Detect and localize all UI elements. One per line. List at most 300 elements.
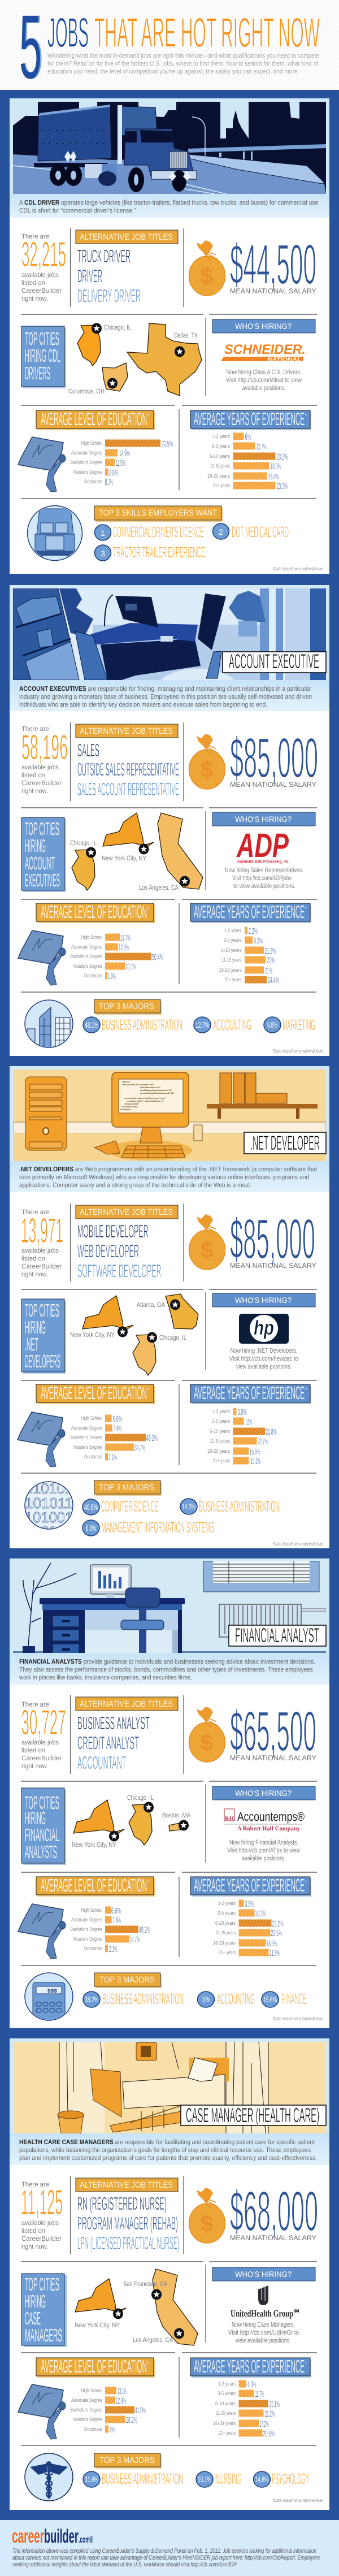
chart: experience: 3-5 years: [212, 443, 230, 449]
map: hiring cities: Los Angeles, CA: [133, 2336, 173, 2344]
who's hiring: WHO'S HIRING?: [235, 1296, 292, 1305]
chart: education: Doctorate: [84, 2426, 102, 2432]
header area: [0, 0, 339, 97]
education heading: [36, 1875, 155, 1897]
job count: listed on: [21, 1254, 45, 1262]
panel: case manager: RN (REGISTERED NURSE): [77, 2193, 167, 2214]
majors list: 38.2%: [85, 1995, 98, 2004]
chart: experience: 22.7%: [258, 1437, 268, 1447]
chart: experience: 3-5 years: [224, 937, 242, 943]
logo: hp: hp: [254, 1316, 274, 1339]
map: hiring cities: Chicago, IL: [70, 839, 97, 847]
who's hiring: Visit http://cb.com/sNnat to view: [226, 376, 302, 384]
chart: education: 20.7%: [125, 962, 136, 972]
illustration: developer desk: </combres>: [120, 1109, 131, 1111]
chart: experience: 16-20 years: [213, 2421, 236, 2427]
logo: Schneider National: NATIONAL: [267, 356, 301, 362]
who's hiring: Visit http://cb.com/ADPjobs: [232, 874, 292, 882]
chart: experience: 22.5%: [271, 1929, 282, 1938]
panel: case manager: 41.8%: [135, 2406, 146, 2415]
job count: There are: [21, 232, 49, 240]
panel: case manager: PROGRAM MANAGER (REHAB): [77, 2213, 178, 2233]
description: FINANCIAL ANALYSTS provide guidance to individuals and businesses seeking advice about investment decisions.: [19, 1659, 315, 1665]
illustration: developer desk: <resourceSet name="siteCss" type="css">: [124, 1097, 166, 1099]
chart: experience: 17.2%: [260, 2419, 269, 2429]
chart: education: 14.7%: [120, 933, 131, 943]
icon: binary digits in circle: 101011: [25, 1495, 73, 1512]
experience heading: *: [305, 1880, 307, 1885]
who's hiring: available positions.: [242, 384, 286, 392]
alternative job titles: [76, 724, 179, 799]
chart: experience: 6-10 years: [221, 947, 242, 954]
icon: money bag: $: [201, 1238, 213, 1263]
map: hiring cities: [75, 2269, 198, 2345]
alternative job titles: CREDIT ANALYST: [77, 1733, 139, 1753]
majors list: 19%: [202, 1995, 210, 2004]
job count: available jobs: [21, 2219, 59, 2227]
majors list: BUSINESS ADMINISTRATION: [102, 1990, 184, 2007]
top cities heading: HIRING: [25, 2291, 46, 2311]
majors heading: TOP 3 MAJORS: [99, 1483, 154, 1492]
chart: experience: 18.3%: [270, 462, 281, 471]
majors list: [82, 1498, 280, 1536]
logo: Schneider National: SCHNEIDER.: [224, 342, 306, 357]
chart: experience: 11-15 years: [221, 957, 242, 963]
chart: education: Doctorate: [84, 1454, 102, 1460]
education heading: *: [147, 413, 149, 418]
alternative job titles: [76, 230, 178, 306]
job count: listed on: [21, 279, 45, 287]
chart: education: 11.5%: [116, 458, 125, 468]
illustration: developer desk: defaultDuration="30": [140, 1086, 160, 1089]
alternative job titles: ALTERNATIVE JOB TITLES: [80, 726, 173, 736]
majors list: BUSINESS ADMINISTRATION: [102, 2470, 183, 2487]
chart: education: Bachelor's Degree: [70, 1926, 102, 1933]
illustration: developer desk: localChangeMonitorInterval="30": [140, 1089, 172, 1092]
logo: Accountemps: A Robert Half Company: [237, 1825, 300, 1832]
chart: experience: 3.8%: [237, 1408, 246, 1417]
description: [19, 200, 320, 214]
chart: education: 4%: [110, 2425, 115, 2435]
majors list: 12.7%: [195, 1020, 209, 1029]
panel: CDL driver: 23.3%: [277, 482, 288, 491]
chart: experience: 3-5 years: [212, 1418, 230, 1425]
chart: education: Doctorate: [84, 479, 102, 485]
job count: listed on: [21, 771, 45, 779]
chart: experience: 11%: [246, 1417, 252, 1427]
description: [19, 686, 312, 708]
icon: graduation cap: [18, 1904, 66, 1959]
chart: education: Bachelor's Degree: [70, 1435, 102, 1441]
map: hiring cities: Atlanta, GA: [137, 1301, 165, 1309]
alternative job titles: ACCOUNTANT: [77, 1752, 127, 1773]
footnote: *Data based on a national level: [272, 2016, 324, 2021]
chart: education: 7.4%: [113, 1424, 121, 1434]
chart: experience: 1-2 years: [218, 1900, 236, 1907]
panel: CDL driver: AVERAGE LEVEL OF EDUCATION: [41, 409, 147, 429]
skills list: 1: [101, 529, 105, 538]
chart: education: Doctorate: [84, 1946, 102, 1952]
education heading: [36, 1383, 155, 1404]
map: hiring cities: [70, 1294, 198, 1375]
who's hiring: WHO'S HIRING?: [235, 322, 292, 331]
salary: MEAN NATIONAL SALARY: [230, 2234, 317, 2242]
who's hiring: Visit http://cb.com/hewpac to: [229, 1354, 298, 1362]
majors heading: [94, 999, 162, 1015]
chart: education: Bachelor's Degree: [70, 954, 102, 960]
chart: education: 34.7%: [129, 1935, 140, 1945]
chart: experience: 21+ years: [219, 2430, 236, 2436]
footnote: *Data based on a national level: [272, 2497, 324, 2503]
chart: education: 6.6%: [113, 1414, 122, 1424]
chart: experience: [207, 1408, 277, 1466]
who's hiring: available positions.: [242, 1854, 285, 1862]
job count: [21, 2180, 63, 2250]
job count: There are: [21, 1208, 49, 1216]
panel: case manager: MANAGERS: [25, 2325, 62, 2345]
chart: experience: 3-5 years: [218, 1910, 236, 1916]
map: hiring cities: Dallas, TX: [174, 331, 198, 339]
icon: calculator in circle: [25, 1973, 73, 2025]
job count: listed on: [21, 1746, 45, 1754]
job count: There are: [21, 2180, 49, 2188]
majors list: COMPUTER SCIENCE: [101, 1498, 158, 1515]
top cities heading: .NET: [25, 1334, 38, 1354]
panel: account executive: TOP CITIES: [25, 819, 59, 839]
illustration: truck in city: [13, 102, 326, 194]
description: ACCOUNT EXECUTIVES are responsible for finding, managing and maintaining client relationships in a particular: [19, 686, 311, 692]
chart: education: Master's Degree: [73, 963, 102, 969]
panel: CDL driver: 23.2%: [277, 452, 288, 462]
map: hiring cities: Chicago, IL: [104, 323, 131, 331]
chart: education: Bachelor's Degree: [70, 460, 102, 466]
illustration: developer desk: <filters>: [122, 1081, 130, 1083]
chart: experience: 1-2 years: [212, 434, 230, 440]
top cities heading: [21, 326, 66, 388]
who's hiring: Visit http://cb.com/UdHeGr to: [228, 2328, 299, 2336]
who's hiring: [212, 2267, 315, 2344]
who's hiring: view available positions.: [236, 1362, 292, 1370]
panel: financial analyst: ANALYSTS: [25, 1842, 57, 1862]
panel: financial analyst: 49.2%: [139, 1925, 150, 1935]
map: hiring cities: [70, 813, 203, 891]
chart: education: Master's Degree: [73, 1936, 102, 1942]
chart: experience: 11-15 years: [210, 1438, 230, 1444]
skills list: [95, 523, 289, 561]
icon: money bag: [189, 734, 225, 789]
majors list: 15.6%: [263, 1995, 277, 2004]
job count: available jobs: [21, 763, 59, 771]
icon: money bag: [189, 240, 225, 296]
chart: education: [70, 1414, 158, 1462]
panel: financial analyst: 23.2%: [272, 1919, 284, 1929]
icon: graduation cap: [18, 437, 66, 492]
job count: right now.: [21, 787, 48, 795]
panel: CDL driver: HIRING CDL: [25, 345, 60, 366]
chart: education: High School: [81, 934, 102, 941]
panel: account executive: 24.4%: [268, 976, 279, 985]
chart: experience: 4.3%: [247, 2380, 257, 2389]
alternative job titles: WEB DEVELOPER: [77, 1241, 139, 1261]
panel: account executive: [10, 585, 329, 1056]
footnote: *Data based on a national level: [272, 1048, 324, 1054]
top cities heading: [21, 1299, 66, 1374]
panel: account executive: 58,196: [21, 728, 68, 767]
chart: experience: 6-10 years: [215, 2401, 236, 2407]
chart: education: 6.6%: [111, 1906, 121, 1916]
chart: experience: 1-2 years: [218, 2381, 236, 2387]
majors heading: [94, 1973, 162, 1988]
majors heading: TOP 3 MAJORS: [99, 1002, 154, 1011]
chart: experience: 21+ years: [213, 1458, 230, 1464]
job count: available jobs: [21, 1738, 59, 1746]
chart: experience: 23%: [267, 956, 275, 966]
job count: right now.: [21, 1270, 48, 1278]
top cities heading: HIRING: [25, 835, 46, 856]
icon: graduation cap: [18, 930, 66, 985]
icon: graduation cap: [18, 2384, 66, 2439]
who's hiring: Now hiring Sales Representatives.: [225, 866, 303, 874]
majors heading: TOP 3 MAJORS: [99, 1975, 155, 1985]
who's hiring: WHO'S HIRING?: [235, 815, 292, 824]
chart: experience: 11.7%: [255, 2389, 264, 2399]
map: hiring cities: Columbus, OH: [68, 387, 105, 395]
map: hiring cities: Chicago, IL: [127, 1794, 154, 1802]
chart: experience: 6-10 years: [215, 1920, 236, 1926]
map: hiring cities: San Francisco, CA: [123, 2280, 167, 2288]
illustration: hospital room: [13, 2042, 326, 2133]
majors list: ACCOUNTING: [217, 1990, 255, 2007]
majors heading: TOP 3 MAJORS: [99, 2456, 155, 2465]
chart: education: High School: [81, 1415, 102, 1422]
top skills heading: [94, 506, 223, 522]
title numeral 5: [19, 0, 43, 97]
panel: account executive: 50.4%: [152, 953, 163, 962]
chart: experience: 16-20 years: [219, 967, 242, 973]
top cities heading: HIRING: [25, 1317, 46, 1337]
icon: money bag: $: [201, 1730, 213, 1755]
description: [19, 2139, 317, 2162]
description: work in places like banks, insurance companies, and securities firms.: [19, 1674, 192, 1681]
illustration: developer desk: [13, 1070, 326, 1161]
who's hiring: Now hiring Case Managers.: [232, 2320, 295, 2328]
chart: education: High School: [81, 2388, 102, 2394]
panel: CDL driver: [10, 98, 329, 574]
panel: financial analyst: TOP CITIES: [25, 1793, 59, 1813]
chart: experience: 8.3%: [254, 936, 263, 946]
chart: experience: [213, 2380, 280, 2439]
job count: CareerBuilder: [21, 2235, 62, 2242]
icon: money bag: $: [201, 2211, 213, 2236]
job count: right now.: [21, 1762, 48, 1770]
alternative job titles: ALTERNATIVE JOB TITLES: [80, 1207, 173, 1217]
chart: experience: 18.5%: [267, 1939, 277, 1949]
panel: case manager: AVERAGE LEVEL OF EDUCATION: [41, 2356, 147, 2376]
icon: money bag: $: [201, 757, 213, 782]
chart: experience: 15.5%: [250, 1447, 260, 1457]
majors list: 48.1%: [85, 1020, 98, 1029]
alternative job titles: DRIVER: [77, 266, 102, 286]
who's hiring: Now hiring Class A CDL Drivers.: [226, 368, 302, 376]
icon: binary digits in circle: 010100: [25, 1523, 73, 1540]
chart: education: High School: [81, 1907, 102, 1913]
footer: [0, 2520, 339, 2576]
chart: experience: 21+ years: [219, 1950, 236, 1956]
map: hiring cities: Chicago, IL: [159, 1334, 186, 1341]
top cities heading: DRIVERS: [25, 363, 50, 383]
panel: financial analyst: [10, 1558, 329, 2028]
map: hiring cities: New York City, NY: [70, 1331, 115, 1339]
chart: experience: 16-20 years: [207, 473, 230, 479]
icon: binary digits in circle: 101001: [25, 1509, 73, 1526]
icon: truck front in circle: [27, 505, 82, 561]
chart: experience: 3-5 years: [218, 2391, 236, 2397]
icon: binary digits in circle: [24, 1481, 73, 1530]
chart: education: 2.1%: [109, 1945, 118, 1954]
education heading: *: [147, 906, 149, 911]
job count: right now.: [21, 2242, 48, 2250]
icon: money bag: [189, 1707, 225, 1762]
footnote: *Data based on a national level: [272, 566, 324, 572]
chart: experience: 21+ years: [225, 977, 242, 983]
logo: UnitedHealth Group: [231, 2285, 301, 2319]
description: runs primarily on Microsoft Windows) who are responsible for developing various online interfaces, programs and: [19, 1174, 309, 1181]
chart: education: Associate Degree: [71, 2397, 102, 2404]
panel: .NET developer: SOFTWARE DEVELOPER: [77, 1261, 162, 1281]
chart: experience: [207, 432, 288, 491]
logo: Accountemps: [224, 1809, 305, 1832]
chart: experience: 21.8%: [269, 1949, 280, 1958]
education heading: *: [147, 1387, 149, 1392]
chart: education: High School: [81, 440, 102, 447]
panel: .NET developer: 31.8%: [266, 1427, 277, 1437]
chart: experience: 16-20 years: [213, 1940, 236, 1946]
job count: available jobs: [21, 1246, 59, 1254]
description: individuals who are able to identify key decision makers and execute sales from beginning to end.: [19, 702, 267, 708]
alternative job titles: [76, 1697, 178, 1773]
top cities heading: CASE: [25, 2308, 41, 2328]
chart: education: Bachelor's Degree: [70, 2407, 102, 2413]
chart: education: 7.4%: [112, 1916, 121, 1925]
panel: account executive: ACCOUNT: [25, 853, 55, 873]
top cities heading: [21, 2274, 67, 2347]
who's hiring: [212, 1786, 315, 1862]
alternative job titles: SALES: [77, 740, 99, 760]
who's hiring: to view available positions.: [233, 882, 295, 890]
chart: experience: 21.2%: [265, 946, 276, 956]
chart: experience: 3.8%: [245, 1899, 254, 1909]
panel: CDL driver: 32,215: [21, 235, 66, 274]
icon: money bag: [189, 2188, 225, 2243]
panel: case manager: 25.1%: [269, 2400, 280, 2409]
salary: MEAN NATIONAL SALARY: [230, 1754, 317, 1762]
who's hiring: Visit http://cb.com/ATps to view: [227, 1846, 300, 1854]
chart: experience: [219, 927, 279, 985]
chart: experience: 11-15 years: [210, 463, 230, 469]
logo: Accountemps: Accountemps®: [237, 1809, 305, 1824]
header area: JOBS: [47, 9, 89, 56]
description: [19, 1659, 315, 1681]
panel: .NET developer: 13,971: [21, 1211, 63, 1250]
chart: education: Master's Degree: [73, 1444, 102, 1451]
icon: calculator in circle: $$$: [47, 1988, 57, 1994]
job count: right now.: [21, 295, 48, 302]
panel: CDL driver: TOP CITIES: [25, 328, 59, 349]
panel: account executive: AVERAGE LEVEL OF EDUCATION: [41, 902, 147, 922]
chart: education: 13.1%: [118, 2387, 127, 2396]
map: hiring cities: [68, 323, 202, 396]
chart: experience: 21.2%: [264, 2409, 275, 2419]
majors list: 9.8%: [267, 1020, 277, 1029]
map: hiring cities: Boston, MA: [162, 1811, 190, 1819]
alternative job titles: ALTERNATIVE JOB TITLES: [80, 232, 173, 242]
panel: case manager: TOP CITIES: [25, 2274, 59, 2294]
who's hiring: WHO'S HIRING?: [235, 2270, 292, 2279]
majors list: BUSINESS ADMINISTRATION: [102, 1016, 182, 1033]
chart: experience: 6-10 years: [210, 1428, 230, 1435]
who's hiring: [212, 812, 315, 890]
chart: education: [70, 2387, 146, 2435]
logo: hp: [239, 1314, 289, 1344]
source note: seeking additional insights about the labor demand of the U.S. workforce should visit http://cb.com/SandDP.: [12, 2561, 237, 2568]
chart: education: 2.1%: [108, 1453, 117, 1462]
chart: education: 2.8%: [109, 468, 118, 478]
description: HEALTH CARE CASE MANAGERS are responsible for facilitating and coordinating patient care for specific patient: [19, 2139, 315, 2146]
intro paragraph: [47, 53, 319, 75]
map: hiring cities: Los Angeles, CA: [139, 884, 179, 891]
alternative job titles: MOBILE DEVELOPER: [77, 1221, 148, 1241]
map: hiring cities: New York City, NY: [75, 2321, 120, 2329]
illustration: developer desk: </resourceSet>: [124, 1103, 139, 1105]
chart: experience: [213, 1899, 284, 1958]
chart: education: 12.9%: [116, 2396, 126, 2406]
experience heading: *: [305, 2361, 307, 2366]
logo: Accountemps: RH: [225, 1816, 234, 1822]
illustration: developer desk: <resource path="~/content/site.css" />: [127, 1100, 164, 1102]
who's hiring: Now hiring .NET Developers.: [231, 1347, 297, 1354]
illustration: office: [13, 588, 326, 680]
chart: experience: 6%: [245, 432, 251, 442]
job count: [21, 1208, 63, 1278]
education heading: *: [147, 2361, 149, 2366]
logo: ADP: ADP: [236, 826, 289, 864]
majors heading: [94, 2453, 162, 2469]
icon: money bag: [189, 1214, 225, 1270]
who's hiring: Now hiring Financial Analysts.: [229, 1838, 298, 1846]
panel: financial analyst: FINANCIAL: [25, 1825, 59, 1845]
alternative job titles: DELIVERY DRIVER: [77, 285, 141, 306]
chart: education: 12.6%: [119, 943, 129, 953]
chart: education: Associate Degree: [71, 944, 102, 950]
job count: [21, 1700, 66, 1770]
chart: experience: 11-15 years: [216, 1930, 236, 1936]
job count: listed on: [21, 2227, 45, 2235]
panel: financial analyst: 30,727: [21, 1703, 66, 1742]
chart: education: Associate Degree: [71, 1425, 102, 1431]
chart: education: [70, 1906, 150, 1954]
map: hiring cities: New York City, NY: [72, 1841, 116, 1848]
education heading: *: [147, 1880, 149, 1885]
education heading: [36, 2356, 155, 2378]
map: hiring cities: [72, 1794, 190, 1848]
job count: CareerBuilder: [21, 1754, 62, 1762]
icon: caduceus in circle: [25, 2453, 73, 2501]
alternative job titles: BUSINESS ANALYST: [77, 1713, 150, 1733]
chart: experience: 2.2%: [249, 927, 258, 936]
panel: case manager: [10, 2038, 329, 2510]
salary: MEAN NATIONAL SALARY: [230, 287, 317, 295]
chart: education: 28.2%: [126, 2415, 137, 2425]
